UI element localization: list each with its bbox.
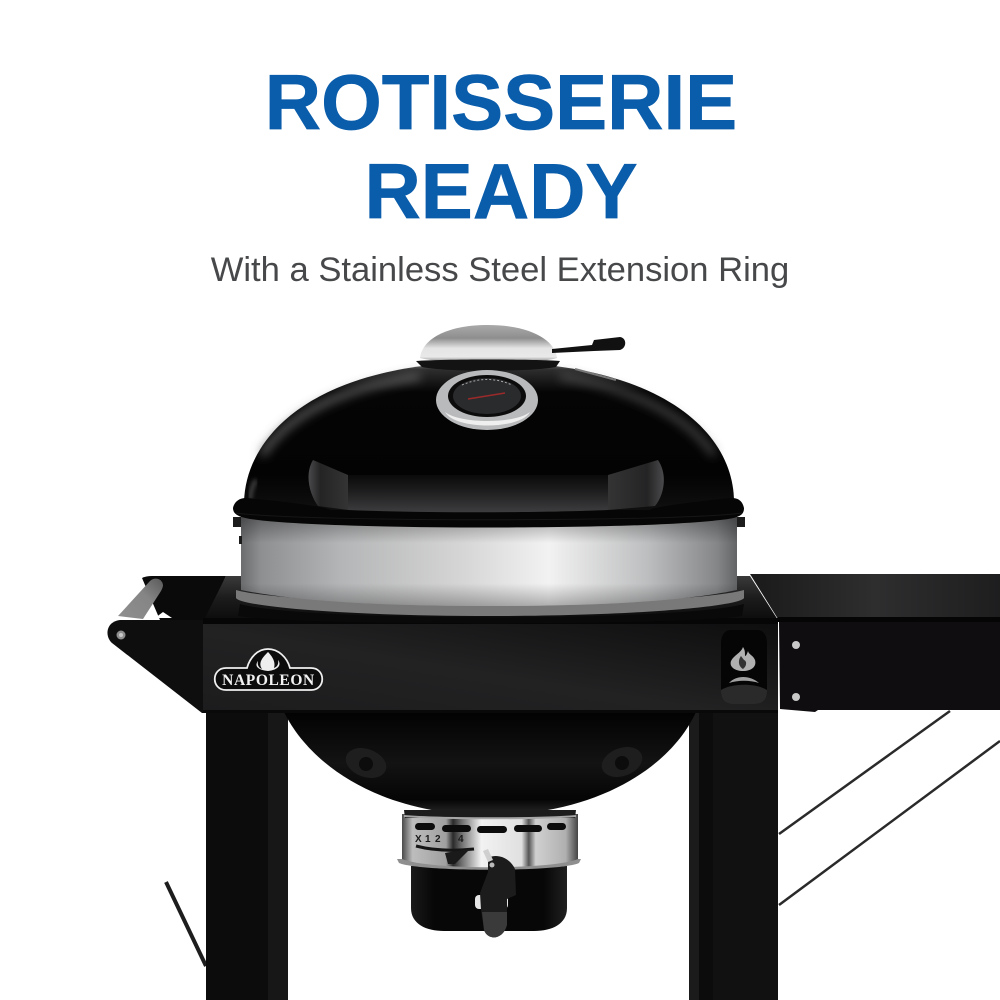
vent scale [415, 834, 464, 845]
damper vent knob [416, 325, 625, 371]
right side shelf [750, 574, 1000, 712]
left handle and side bracket [107, 576, 226, 713]
base lip [236, 590, 744, 616]
logo: Napoleon: NAPOLEON [222, 672, 315, 689]
flange [397, 859, 581, 870]
title: READY [364, 147, 638, 235]
rim [233, 498, 744, 528]
shadow under ring [238, 604, 744, 624]
glossy highlights [262, 376, 420, 455]
vent scale: X [415, 834, 422, 845]
subtitle: With a Stainless Steel Extension Ring [211, 251, 789, 289]
bracket [107, 620, 205, 713]
chrome band [402, 814, 578, 867]
vent scale: 2 [435, 834, 441, 845]
grip rod [118, 579, 163, 619]
bowl [284, 712, 696, 815]
title [265, 58, 737, 235]
left legs [206, 712, 288, 1000]
ash catcher and vent [397, 810, 581, 937]
ash cup [411, 866, 567, 931]
vent handle [480, 856, 516, 937]
support rods right [779, 711, 1000, 905]
lid [233, 362, 744, 528]
hinges [233, 517, 241, 527]
right legs [689, 712, 778, 1000]
thermometer [436, 370, 538, 430]
vent scale: 4 [458, 834, 464, 845]
left rod [166, 882, 206, 966]
lid handle [348, 475, 608, 512]
stainless ring [233, 516, 745, 624]
top shelf [204, 576, 778, 620]
front panel [203, 618, 778, 713]
title: ROTISSERIE [265, 58, 737, 146]
tray [142, 576, 226, 620]
slots [415, 823, 566, 833]
vent scale: 1 [425, 834, 431, 845]
burner knob [721, 630, 767, 704]
logo: Napoleon [215, 649, 322, 690]
